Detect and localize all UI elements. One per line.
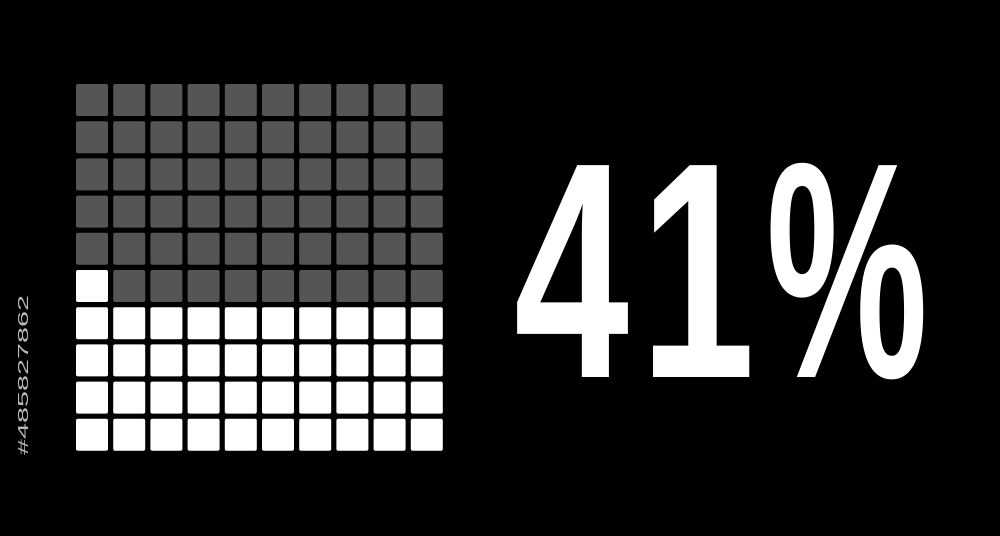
percentage label: 1 [640, 99, 755, 443]
percentage label [514, 99, 928, 443]
stock id text: #485827862 [15, 295, 32, 455]
percentage label: 4 [514, 99, 630, 443]
waffle chart: 41 of 100 cells filled [76, 84, 443, 451]
